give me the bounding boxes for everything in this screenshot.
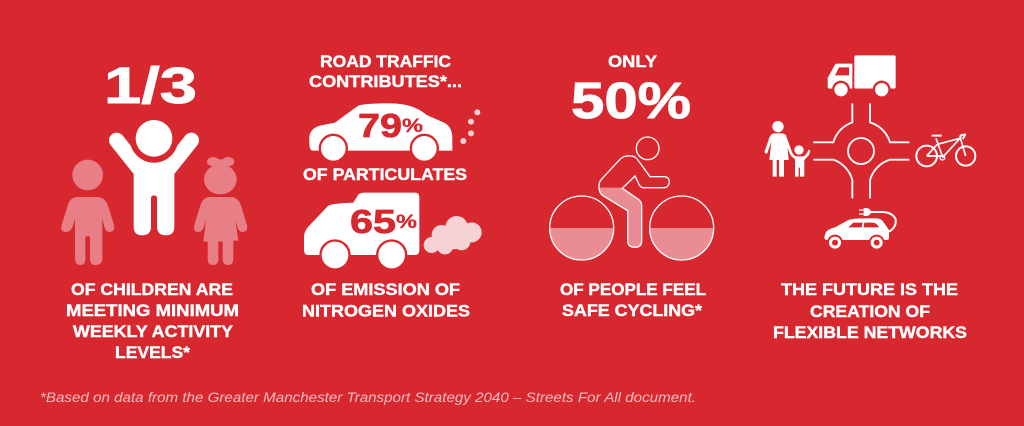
stat: 65 percent: % [396,212,417,233]
panel: road traffic emissions [302,53,482,320]
label: particulates: OF PARTICULATES [303,166,467,184]
caption: nitrogen oxides: NITROGEN OXIDES [302,302,470,320]
stat: 65 percent: 65 [350,203,396,240]
stat: 79 percent [358,107,423,144]
stat: 65 percent [350,203,417,240]
label: only: ONLY [608,53,657,71]
heading: road traffic: ROAD TRAFFIC [320,53,451,71]
caption: children: MEETING MINIMUM [66,302,239,320]
caption: flexible networks: CREATION OF [810,303,930,321]
caption: flexible networks: FLEXIBLE NETWORKS [773,324,967,342]
stat: 50 percent: 50% [571,72,691,129]
caption: safe cycling: OF PEOPLE FEEL [560,281,706,299]
caption: safe cycling [560,281,706,320]
caption: flexible networks [773,281,967,342]
heading: road traffic: CONTRIBUTES*... [309,73,462,91]
icon: car with exhaust dots [309,103,480,163]
caption: children: OF CHILDREN ARE [71,281,233,299]
caption: children [66,281,239,362]
caption: nitrogen oxides [302,281,470,320]
panel: flexible networks [764,55,975,342]
stat: 79 percent: % [402,116,423,137]
caption: safe cycling: SAFE CYCLING* [562,302,703,320]
icon: half-filled cyclist [550,137,714,260]
panel: children activity [61,57,247,362]
stat: one third: 1/3 [104,57,197,114]
caption: flexible networks: THE FUTURE IS THE [781,281,958,299]
icon: van with cloud [304,193,482,271]
icon: parent and child [764,121,810,177]
icon: electric car [824,208,896,251]
heading: road traffic [309,53,462,91]
footnote: *Based on data from the Greater Manchester Transport Strategy 2040 – Streets For All document. [40,390,696,405]
panel: safe cycling [550,53,714,320]
icon: three children [61,114,247,265]
caption: nitrogen oxides: OF EMISSION OF [311,281,460,299]
icon: truck [828,55,896,99]
icon: roundabout [813,103,909,198]
caption: children: WEEKLY ACTIVITY [73,323,233,341]
icon: bicycle [916,135,975,166]
stat: 79 percent: 79 [358,107,402,144]
caption: children: LEVELS* [115,344,191,362]
